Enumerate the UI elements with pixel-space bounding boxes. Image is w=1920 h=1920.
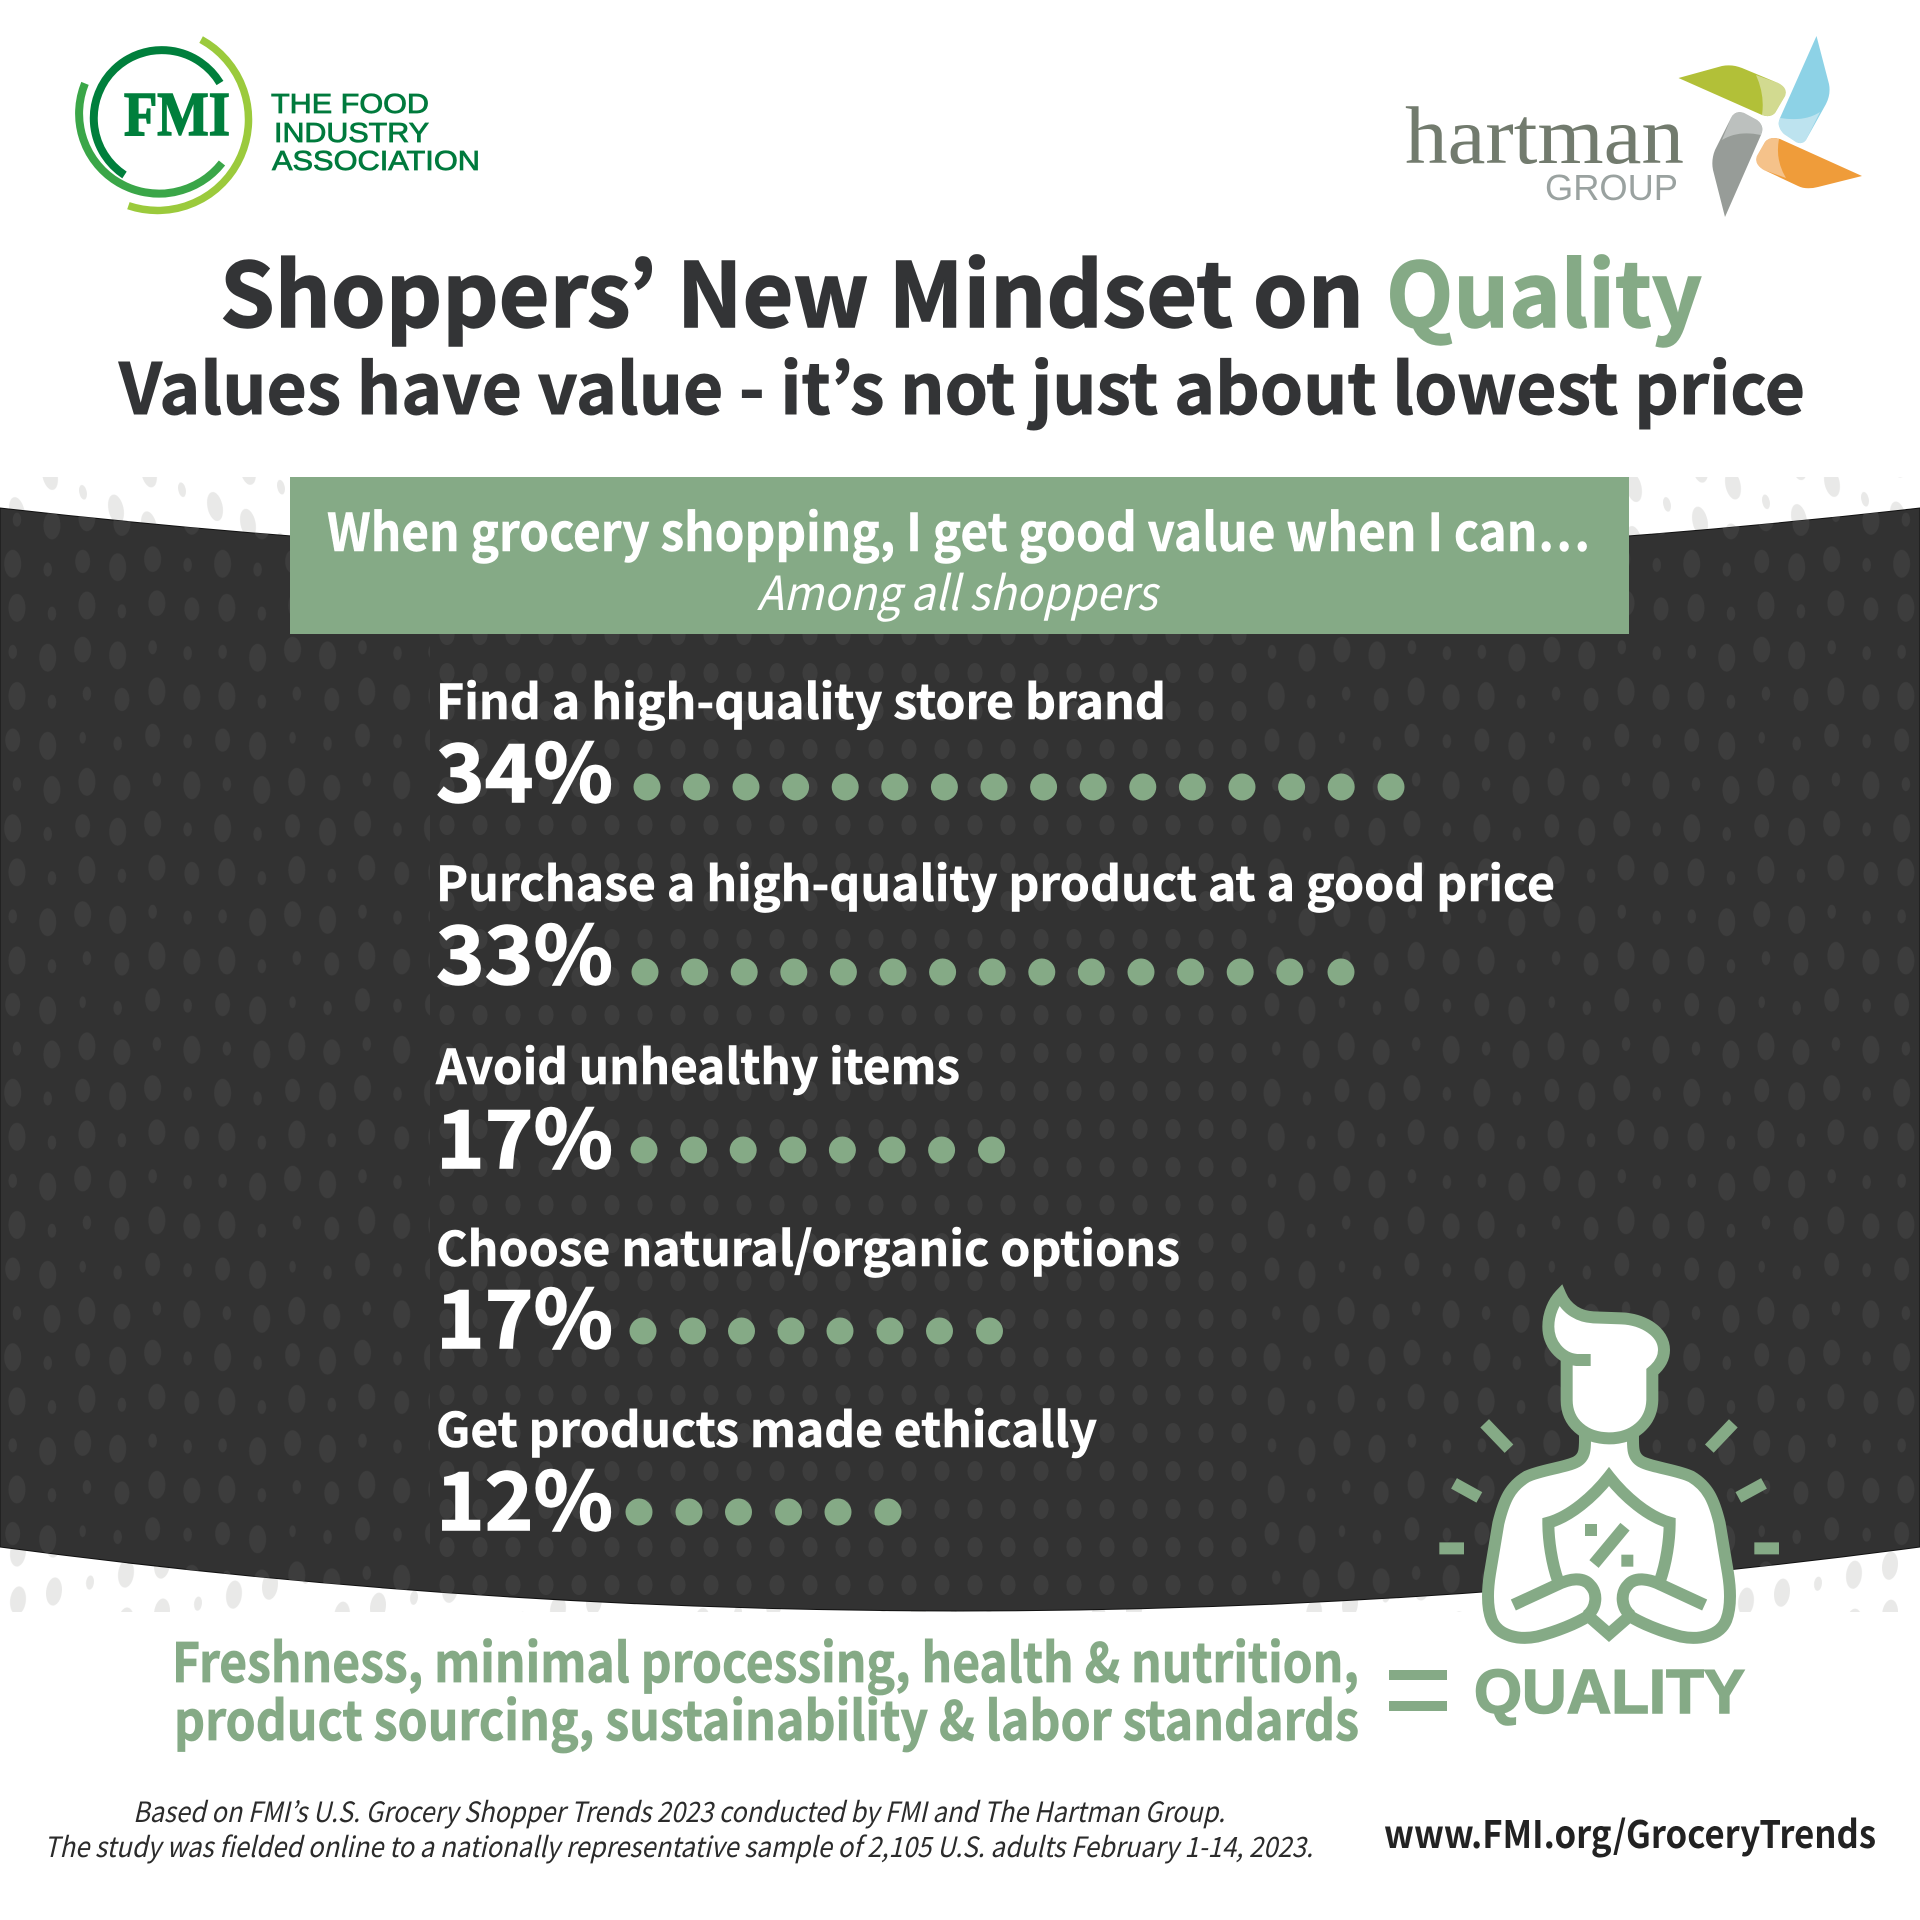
row: natural organic: Choose natural/organic options <box>436 1210 1180 1280</box>
shield <box>1548 1477 1670 1582</box>
row: made ethically: Get products made ethically <box>436 1391 1097 1461</box>
main title <box>220 224 1702 353</box>
arms <box>1513 1579 1705 1616</box>
quality word: QUALITY <box>1474 1658 1745 1727</box>
dark curved panel <box>0 500 1920 1700</box>
footnote: The study was fielded online to a nationally representative sample of 2,105 U.S. adults February 1-14, 2023. <box>44 1826 1313 1866</box>
wordmark group: GROUP <box>1545 167 1678 208</box>
percent sign <box>1585 1524 1633 1567</box>
head <box>1548 1295 1664 1438</box>
banner heading: When grocery shopping, I get good value when I can… <box>327 491 1590 566</box>
row: good price: 33% <box>436 892 613 1008</box>
title green word: Quality <box>1386 224 1702 353</box>
logo wordmark: ASSOCIATION <box>272 145 480 176</box>
banner subheading: Among all shoppers <box>757 555 1161 624</box>
question banner <box>290 477 1629 634</box>
logo wordmark: INDUSTRY <box>274 117 429 148</box>
wordmark hartman: hartman <box>1405 90 1684 181</box>
row: unhealthy items: Avoid unhealthy items <box>435 1028 960 1098</box>
logo wordmark <box>271 88 480 176</box>
row: unhealthy items <box>435 1028 1005 1192</box>
row: good price <box>436 845 1555 1008</box>
dots: 17% <box>630 1136 1005 1164</box>
dotted white band behind panel <box>0 477 1920 1612</box>
row: unhealthy items: 17% <box>436 1076 613 1192</box>
row: good price: Purchase a high-quality product at a good price <box>436 845 1555 915</box>
website url: www.FMI.org/GroceryTrends <box>1384 1804 1876 1859</box>
body <box>1488 1435 1730 1638</box>
dots: 17% second <box>630 1318 1003 1344</box>
title dark part: Shoppers’ New Mindset on <box>220 224 1364 353</box>
row: made ethically <box>436 1391 1097 1554</box>
icon: shopper with shield <box>1439 1295 1779 1638</box>
equals sign <box>1389 1670 1447 1711</box>
footnote: Based on FMI’s U.S. Grocery Shopper Trends 2023 conducted by FMI and The Hartman Group. <box>133 1791 1225 1831</box>
row: made ethically: 12% <box>436 1438 613 1554</box>
dots: 12% <box>626 1498 902 1526</box>
row: natural organic: 17% <box>436 1256 613 1372</box>
logo rings <box>79 40 249 210</box>
statement text line two: product sourcing, sustainability & labor standards <box>174 1677 1359 1756</box>
FMI logo <box>79 40 480 210</box>
row: store brand: 34% <box>436 710 613 826</box>
dots: 34% <box>634 774 1404 800</box>
logo letters FMI: FMI <box>124 81 230 149</box>
pinwheel icon <box>1678 36 1862 217</box>
row: natural organic <box>436 1210 1180 1372</box>
row: store brand <box>436 663 1404 826</box>
quality statement <box>172 1619 1745 1756</box>
Hartman Group logo <box>1405 36 1862 217</box>
rays <box>1439 1423 1779 1548</box>
statement text line one: Freshness, minimal processing, health & nutrition, <box>172 1619 1359 1698</box>
footnote <box>44 1791 1313 1866</box>
subtitle: Values have value - it’s not just about lowest price <box>118 334 1805 435</box>
dots: 33% <box>632 958 1354 986</box>
row: store brand: Find a high-quality store brand <box>436 663 1166 733</box>
logo wordmark: THE FOOD <box>271 88 429 119</box>
